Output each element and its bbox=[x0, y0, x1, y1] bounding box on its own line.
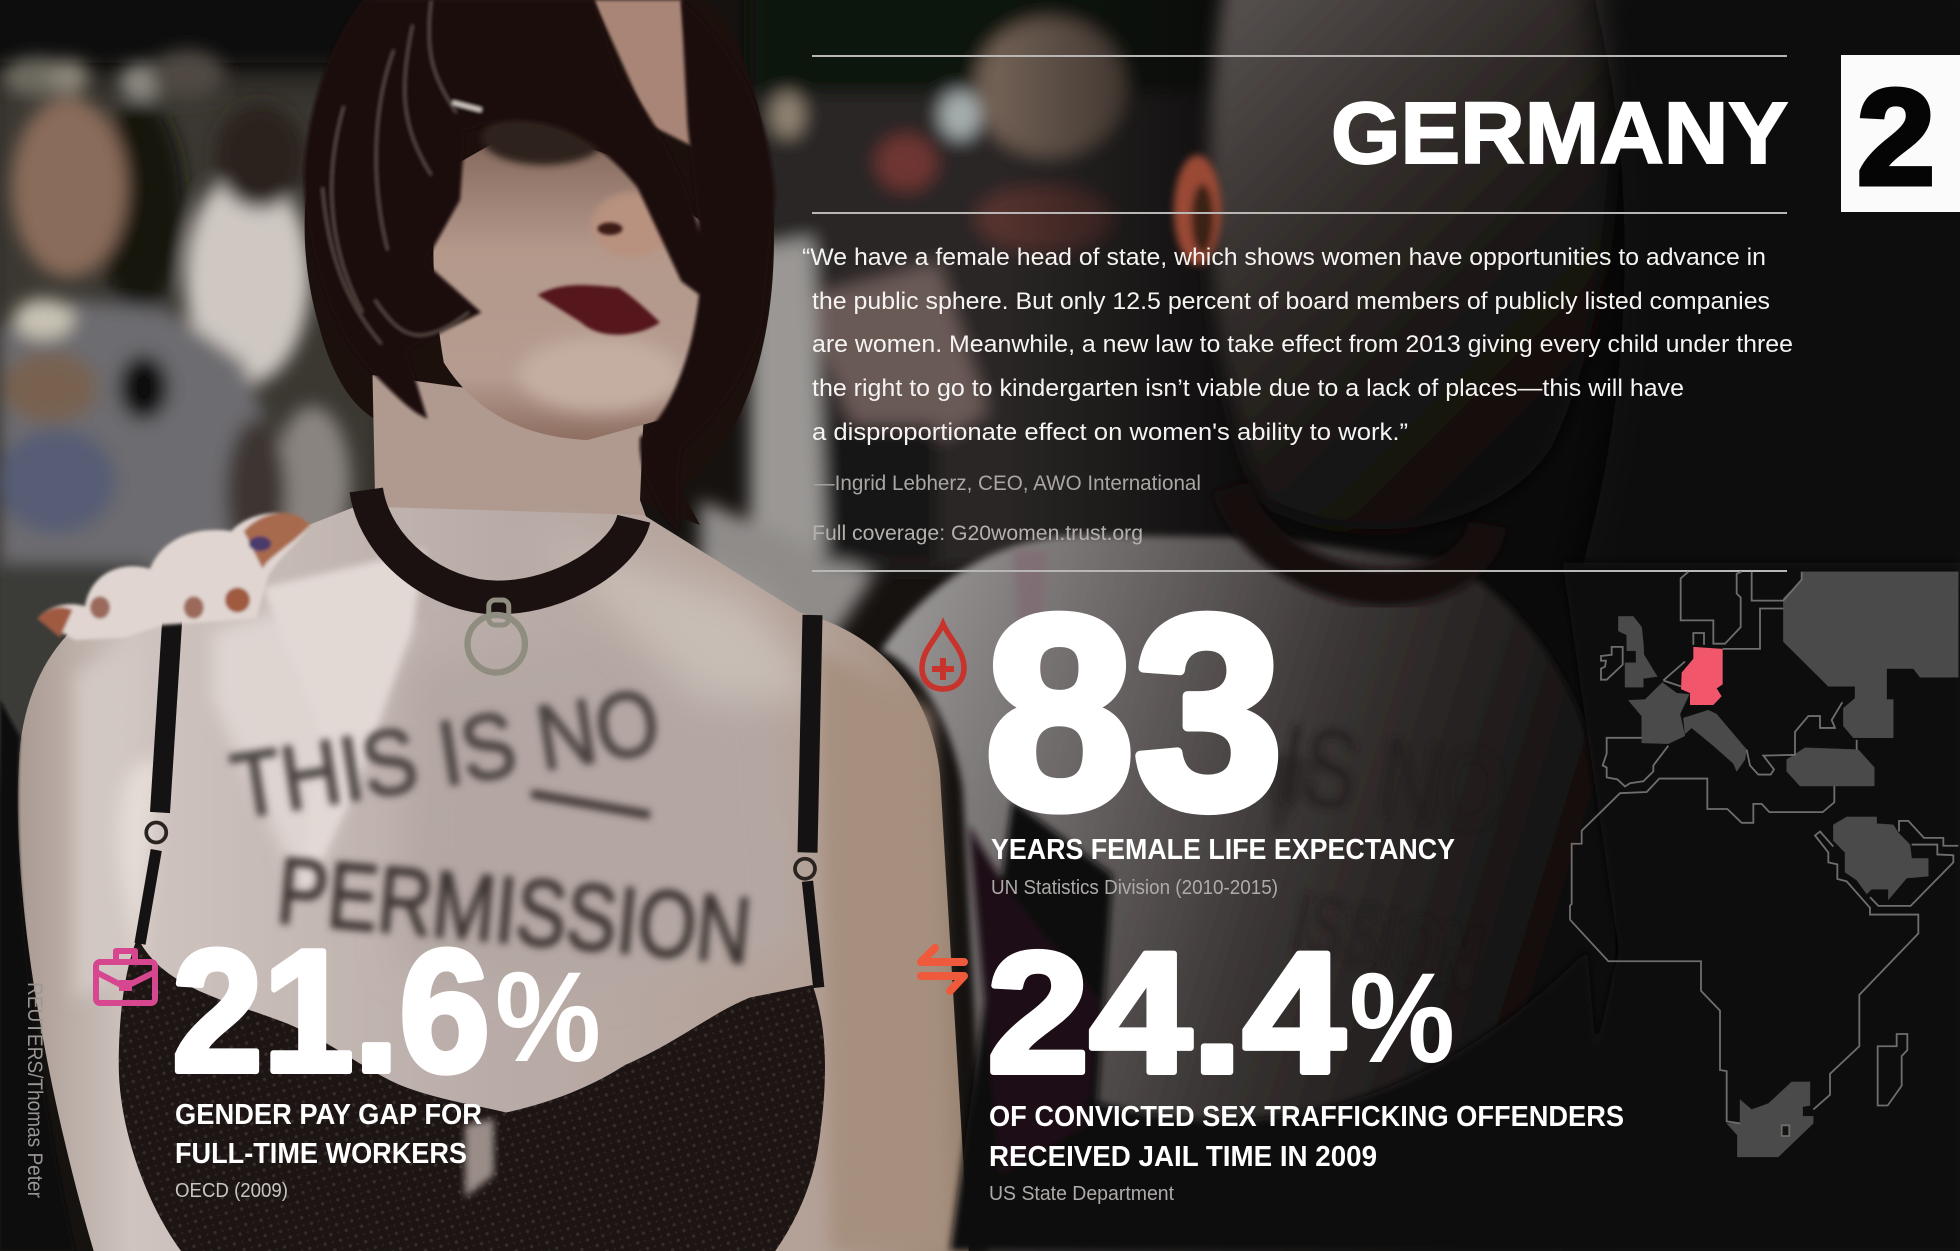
label bbox=[175, 1099, 482, 1170]
dark ghost figure on right bbox=[881, 0, 1960, 1251]
label: GENDER PAY GAP FOR bbox=[175, 1099, 482, 1131]
choker ring bbox=[468, 600, 525, 672]
title: Germany: GERMANY bbox=[1331, 85, 1788, 182]
light and shadow on chest bbox=[75, 538, 950, 1251]
label: RECEIVED JAIL TIME IN 2009 bbox=[989, 1141, 1377, 1173]
rank badge: number 2 bbox=[1841, 55, 1960, 213]
big number 21.6 percent: % bbox=[495, 946, 601, 1089]
source: OECD (2009) bbox=[175, 1179, 288, 1202]
neck bbox=[362, 375, 662, 562]
big number 21.6 percent: 21.6 bbox=[172, 913, 490, 1108]
highlighted country: Germany bbox=[1681, 647, 1723, 705]
bra bbox=[119, 938, 825, 1251]
source: UN Statistics Division (2010-2015) bbox=[991, 876, 1278, 899]
icon: blood drop with cross bbox=[922, 624, 964, 689]
dark left margin bbox=[0, 700, 75, 1251]
painted words on chest: PERMISSION bbox=[273, 838, 756, 985]
big number 24.4 percent: 24.4 bbox=[987, 917, 1345, 1109]
quote text: “We have a female head of state, which shows women have opportunities to advance in bbox=[802, 244, 1766, 271]
quote text: the public sphere. But only 12.5 percent of board members of publicly listed companies bbox=[812, 288, 1770, 315]
blurred crowd at centre right, behind hair bbox=[700, 0, 1275, 650]
icon: briefcase bbox=[96, 951, 155, 1003]
quote attribution: —Ingrid Lebherz, CEO, AWO International bbox=[814, 472, 1201, 495]
label: FULL-TIME WORKERS bbox=[175, 1138, 467, 1170]
quote text: a disproportionate effect on women's ability to work.” bbox=[812, 419, 1408, 446]
second rule bbox=[812, 212, 1787, 214]
label: OF CONVICTED SEX TRAFFICKING OFFENDERS bbox=[989, 1101, 1624, 1133]
hand on shoulder bbox=[38, 513, 310, 640]
icon: exchange arrows bbox=[921, 948, 964, 991]
outlined coastlines bbox=[1570, 572, 1958, 1136]
hair back bbox=[305, 0, 774, 525]
stat: 24.4 percent bbox=[921, 917, 1624, 1205]
torso and arms bbox=[18, 506, 969, 1251]
ghost orange ear bbox=[1174, 155, 1221, 265]
quote text: the right to go to kindergarten isn’t viable due to a lack of places—this will have bbox=[812, 375, 1684, 402]
choker bbox=[366, 490, 634, 598]
cleavage gap bbox=[465, 1119, 494, 1198]
shaded countries bbox=[1618, 572, 1958, 1157]
top rule bbox=[812, 55, 1787, 57]
ghost strap and bra bbox=[950, 562, 1960, 1251]
stat: 83 years female life expectancy bbox=[922, 560, 1455, 899]
map of Europe and Africa bbox=[1570, 572, 1958, 1157]
rank badge: number 2: 2 bbox=[1857, 61, 1935, 213]
big number 83: 83 bbox=[985, 560, 1283, 866]
photo credit: REUTERS/Thomas Peter bbox=[23, 982, 46, 1198]
third rule bbox=[812, 570, 1787, 572]
stat: 21.6 percent gender pay gap bbox=[96, 913, 601, 1202]
label: YEARS FEMALE LIFE EXPECTANCY bbox=[991, 834, 1455, 866]
quote text: are women. Meanwhile, a new law to take effect from 2013 giving every child under three bbox=[812, 331, 1793, 358]
dark ghost figure on right: ISSION bbox=[1284, 873, 1487, 1008]
painted words on chest: THIS IS NO bbox=[224, 668, 667, 839]
source: US State Department bbox=[989, 1182, 1174, 1205]
label bbox=[989, 1101, 1624, 1173]
painted words on chest bbox=[224, 668, 756, 985]
bra straps bbox=[140, 615, 819, 988]
blurred crowd at left bbox=[0, 0, 400, 775]
coverage link: Full coverage: G20women.trust.org bbox=[812, 522, 1143, 545]
dark ghost figure on right: IS NO bbox=[1272, 699, 1512, 855]
big number 24.4 percent: % bbox=[1349, 947, 1455, 1090]
quote text bbox=[802, 244, 1793, 446]
hair front and face bbox=[433, 125, 738, 440]
